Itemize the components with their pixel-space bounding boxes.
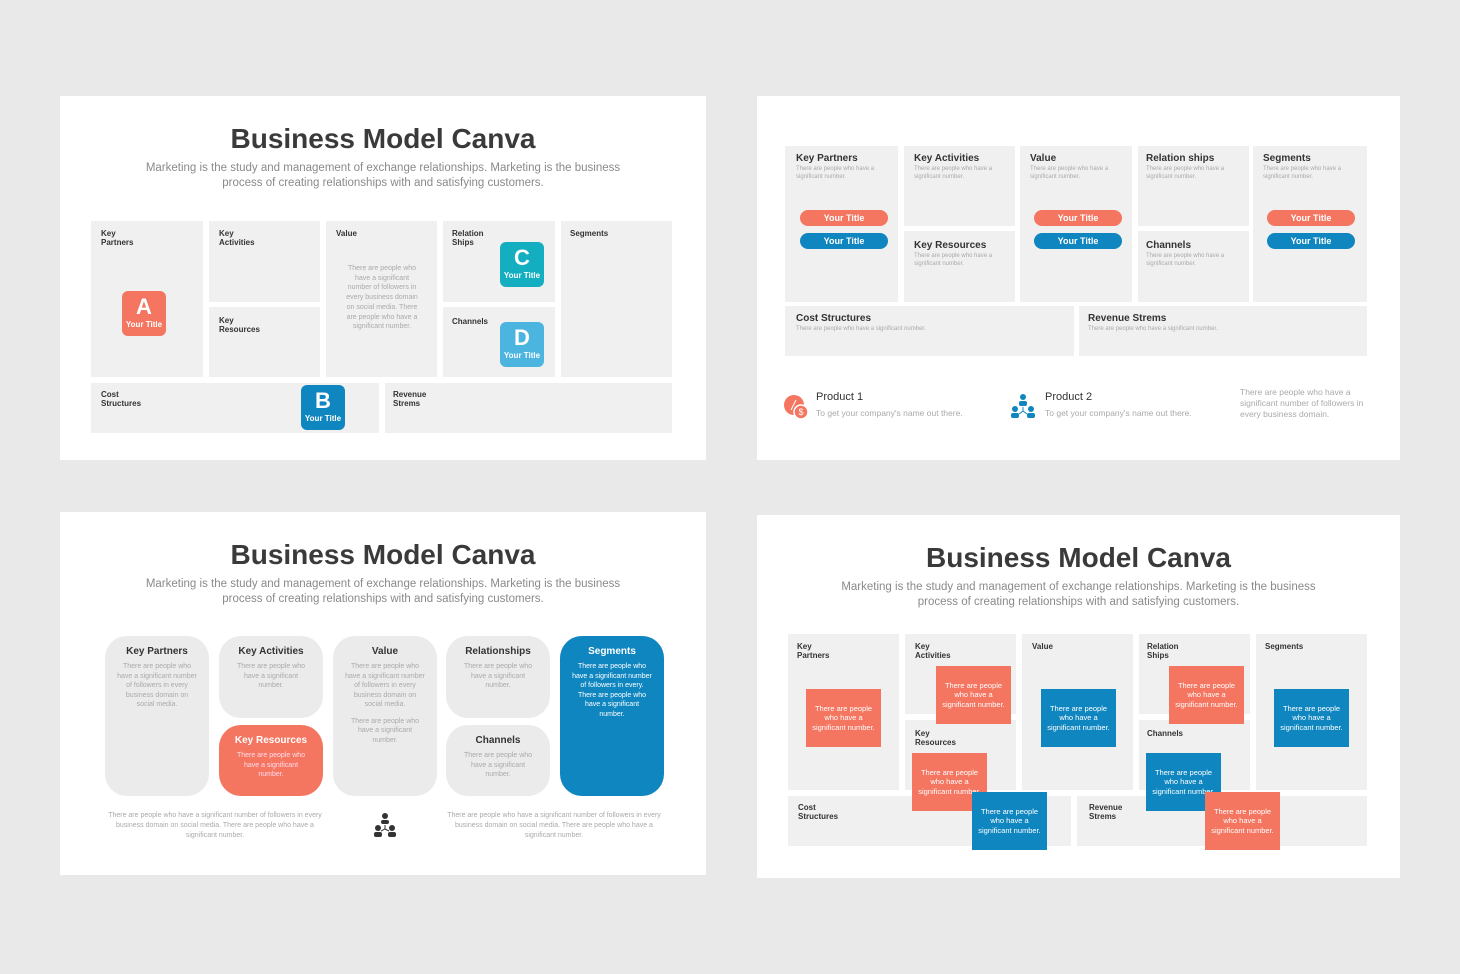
note: value: There are people who have a significant number. (1047, 704, 1110, 732)
title: Business Model Canva (230, 539, 535, 570)
cell: cost structures: Structures (101, 399, 141, 408)
cell: revenue streams: Revenue (393, 390, 426, 399)
note: value (1041, 689, 1116, 747)
card: value (333, 636, 437, 796)
cell: channels (443, 307, 555, 377)
cell: channels: There are people who have a significant number. (1146, 253, 1224, 267)
side text: There are people who have a significant number of followers in every business domain. (1240, 387, 1363, 419)
footer text left: There are people who have a significant number of followers in every business domain on social media. There are people who have a significant number. (108, 812, 322, 839)
card: key partners: There are people who have a significant number of followers in every business domain on social media. (117, 663, 197, 708)
cell: key activities: Key (219, 229, 234, 238)
card: key activities: There are people who have a significant number. (237, 663, 305, 689)
subtitle: process of creating relationships with and satisfying customers. (918, 596, 1239, 608)
cell: key activities: Key Activities (914, 153, 979, 164)
cell: key partners: There are people who have a significant number. (796, 166, 874, 180)
icon: dollar: $ (798, 407, 804, 417)
pills: key partners: Your Title (824, 236, 864, 246)
note: cost structures (972, 792, 1047, 850)
note: channels: There are people who have a significant number. (1152, 768, 1215, 796)
cell: segments (561, 221, 672, 377)
cell: value (1020, 146, 1132, 302)
cell: key partners: Partners (797, 651, 829, 660)
cell: value: Value (336, 229, 357, 238)
pills: segments: Your Title (1291, 236, 1331, 246)
cell: relation ships: There are people who have a significant number. (1146, 166, 1224, 180)
cell: key resources: There are people who have a significant number. (914, 253, 992, 267)
cell: value: Value (1030, 153, 1056, 164)
cell: revenue streams: Revenue Strems (1088, 313, 1166, 324)
cell: segments (1256, 634, 1367, 790)
cell: key resources (209, 307, 320, 377)
product 1 (784, 391, 963, 418)
card: key activities: Key Activities (238, 646, 304, 657)
product 2: Product 2 (1045, 391, 1092, 403)
subtitle (841, 581, 1316, 608)
cell: relation ships: Relation ships (1146, 153, 1214, 164)
card: segments: There are people who have a significant number of followers in every. There are people who have a significant number. (572, 663, 652, 718)
product 2: To get your company's name out there. (1045, 408, 1192, 418)
cell: value: Value (1032, 642, 1053, 651)
cell: key partners: Key Partners (796, 153, 858, 164)
cell: cost structures: Cost (798, 803, 816, 812)
cell: key activities: Key (915, 642, 930, 651)
cell: key resources: Resources (219, 325, 260, 334)
badge B: B (315, 388, 331, 413)
cell: relation ships (1139, 634, 1250, 714)
badge D: D (514, 325, 530, 350)
cell: value: There are people who have a significant number. (1030, 166, 1108, 180)
cell: revenue streams: Strems (1089, 812, 1116, 821)
cell: cost structures: Cost (101, 390, 119, 399)
cell: relation ships: Ships (452, 238, 474, 247)
card: relationships: There are people who have a significant number. (464, 663, 532, 689)
cell: relation ships: Relation (452, 229, 484, 238)
card: key partners (105, 636, 209, 796)
cell: key partners: Key (101, 229, 116, 238)
panel: slide 4 canvas with sticky notes (757, 515, 1400, 878)
note: key activities: There are people who have a significant number. (942, 681, 1005, 709)
cell: revenue streams (385, 383, 672, 433)
note: segments (1274, 689, 1349, 747)
cell: value (326, 221, 437, 377)
icon: dollar (784, 395, 808, 418)
pills: key partners (800, 210, 888, 249)
cell: key partners (788, 634, 899, 790)
cell: key activities: Activities (915, 651, 951, 660)
cell: channels: Channels (452, 317, 488, 326)
card: key resources: Key Resources (235, 735, 307, 746)
card: segments: Segments (588, 646, 636, 657)
cell: value: There are people who have a significant number of followers in every business domain on social media. There are people who have a significant number. (346, 265, 418, 330)
cell: key activities (905, 634, 1016, 714)
note: key resources: There are people who have a significant number. (918, 768, 981, 796)
cell: cost structures (91, 383, 379, 433)
cell: segments: Segments (1263, 153, 1311, 164)
icon: hierarchy (374, 813, 396, 837)
title: Business Model Canva (926, 542, 1231, 573)
note: key partners: There are people who have a significant number. (812, 704, 875, 732)
note: key partners (806, 689, 881, 747)
cell: channels (1138, 231, 1249, 302)
cell: key resources: Key (915, 729, 930, 738)
cell: key resources (904, 231, 1015, 302)
title: Business Model Canva (230, 123, 535, 154)
cell: key resources: Resources (915, 738, 956, 747)
cell: key activities (904, 146, 1015, 226)
card: value: There are people who have a significant number. (351, 718, 419, 744)
card: key resources (219, 725, 323, 796)
subtitle (146, 578, 620, 605)
card: value: Value (372, 646, 398, 657)
card: channels: There are people who have a significant number. (464, 752, 532, 778)
pills: segments (1267, 210, 1355, 249)
cell: key partners: Key (797, 642, 812, 651)
card: channels: Channels (475, 735, 520, 746)
note: relation ships (1169, 666, 1244, 724)
cell: key activities: There are people who have a significant number. (914, 166, 992, 180)
pills: key partners: Your Title (824, 213, 864, 223)
badge C: C (514, 245, 530, 270)
product 1: To get your company's name out there. (816, 408, 963, 418)
cell: key activities (209, 221, 320, 302)
cell: cost structures (788, 796, 1071, 846)
badge A: A (136, 294, 152, 319)
icon: team (1011, 394, 1035, 418)
cell: key resources (905, 720, 1016, 790)
cell: cost structures: Cost Structures (796, 313, 871, 324)
cell: key partners (785, 146, 898, 302)
cell: segments: Segments (570, 229, 608, 238)
note: revenue streams (1205, 792, 1280, 850)
pills: value: Your Title (1058, 213, 1098, 223)
note: key activities (936, 666, 1011, 724)
panel: slide 2 canvas with pills and products (757, 96, 1400, 460)
badge B (301, 385, 345, 430)
card: segments (560, 636, 664, 796)
cell: value (1022, 634, 1133, 790)
product 1: Product 1 (816, 391, 863, 403)
badge B: Your Title (305, 414, 341, 423)
cell: cost structures: Structures (798, 812, 838, 821)
badge D: Your Title (504, 351, 540, 360)
panel: slide 1 canvas with badges (60, 96, 706, 460)
cell: channels (1139, 720, 1250, 790)
cell: revenue streams: Revenue (1089, 803, 1122, 812)
note: cost structures: There are people who have a significant number. (978, 807, 1041, 835)
cell: relation ships: Ships (1147, 651, 1169, 660)
cell: channels: Channels (1147, 729, 1183, 738)
card: relationships (446, 636, 550, 718)
badge C: Your Title (504, 271, 540, 280)
card: key resources: There are people who have a significant number. (237, 752, 305, 778)
note: revenue streams: There are people who have a significant number. (1211, 807, 1274, 835)
badge C (500, 242, 544, 287)
card: key activities (219, 636, 323, 718)
panel: slide 3 rounded canvas (60, 512, 706, 875)
cell: segments (1253, 146, 1367, 302)
cell: relation ships: Relation (1147, 642, 1179, 651)
note: channels (1146, 753, 1221, 811)
subtitle: Marketing is the study and management of exchange relationships. Marketing is the business (146, 162, 620, 174)
note: key resources (912, 753, 987, 811)
cell: segments: There are people who have a significant number. (1263, 166, 1341, 180)
badge D (500, 322, 544, 367)
cell: key activities: Activities (219, 238, 255, 247)
card: key partners: Key Partners (126, 646, 188, 657)
cell: cost structures: There are people who have a significant number. (796, 326, 926, 332)
pills: segments: Your Title (1291, 213, 1331, 223)
cell: revenue streams: Strems (393, 399, 420, 408)
badge A: Your Title (126, 320, 162, 329)
cell: key resources: Key (219, 316, 234, 325)
cell: key partners (91, 221, 203, 377)
cell: revenue streams (1077, 796, 1367, 846)
subtitle: process of creating relationships with and satisfying customers. (222, 593, 544, 605)
cell: segments: Segments (1265, 642, 1303, 651)
cell: relation ships (443, 221, 555, 302)
cell: key partners: Partners (101, 238, 133, 247)
subtitle: Marketing is the study and management of exchange relationships. Marketing is the business (146, 578, 620, 590)
card: channels (446, 725, 550, 796)
cell: key resources: Key Resources (914, 240, 986, 251)
subtitle: Marketing is the study and management of exchange relationships. Marketing is the business (841, 581, 1316, 593)
card: relationships: Relationships (465, 646, 531, 657)
cell: revenue streams: There are people who have a significant number. (1088, 326, 1218, 332)
note: segments: There are people who have a significant number. (1280, 704, 1343, 732)
product 2 (1011, 391, 1192, 418)
footer text right: There are people who have a significant number of followers in every business domain on social media. There are people who have a significant number. (447, 812, 661, 839)
subtitle (146, 162, 620, 189)
subtitle: process of creating relationships with and satisfying customers. (222, 177, 544, 189)
cell: relation ships (1138, 146, 1249, 226)
cell: revenue streams (1079, 306, 1367, 356)
pills: value (1034, 210, 1122, 249)
note: relation ships: There are people who have a significant number. (1175, 681, 1238, 709)
cell: cost structures (785, 306, 1074, 356)
badge A (122, 291, 166, 336)
pills: value: Your Title (1058, 236, 1098, 246)
cell: channels: Channels (1146, 240, 1191, 251)
card: value: There are people who have a significant number of followers in every business domain on social media. (345, 663, 425, 708)
